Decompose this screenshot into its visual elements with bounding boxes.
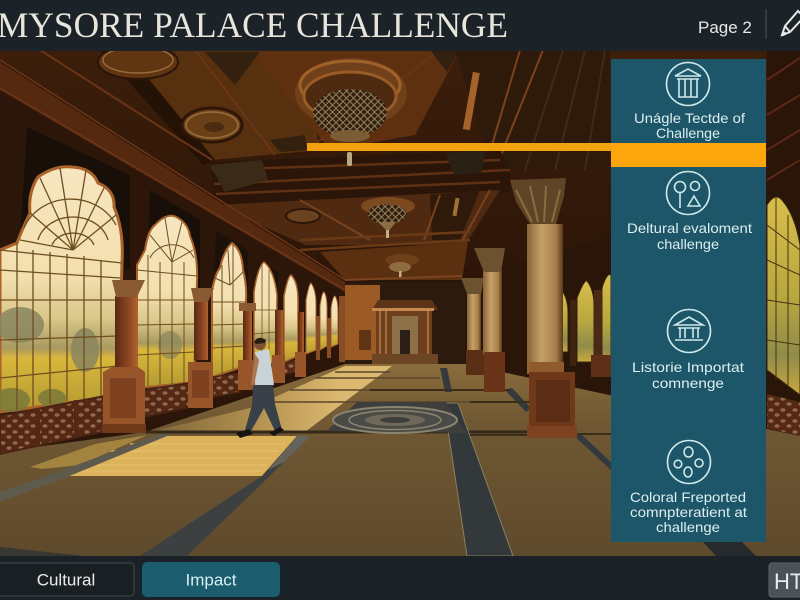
window 3: [212, 243, 246, 377]
column far: [461, 278, 484, 375]
rosette: ceiling centre: [182, 108, 242, 142]
window 6: [306, 283, 316, 354]
person walking: [236, 338, 284, 438]
left wall: [0, 60, 345, 470]
label: [630, 489, 747, 535]
top bar: [0, 0, 800, 51]
label: Challenge: [656, 125, 720, 141]
item: cultural evaluation: [627, 172, 752, 252]
window 4: [254, 262, 277, 368]
item: colonial report: [630, 440, 747, 535]
column near: [510, 178, 577, 438]
label: [627, 220, 752, 252]
label: challenge: [656, 519, 720, 535]
label: challenge: [657, 236, 719, 252]
panel: challenges: [611, 59, 766, 542]
pavilion door: [372, 300, 438, 364]
right window: [767, 196, 800, 436]
label: comnpteratient at: [630, 504, 747, 520]
back wall: [345, 282, 465, 366]
sunlit patch: [67, 436, 297, 476]
progress bar: orange: [307, 143, 766, 167]
main chandelier: [295, 58, 407, 166]
label: comnenge: [652, 375, 724, 391]
button: Cultural: Cultural: [37, 570, 95, 590]
page label: Page 2: [698, 18, 752, 37]
item: historic importance: [632, 310, 744, 391]
far sunlit floor: [150, 366, 392, 432]
ceiling: [0, 45, 800, 280]
icon: temple: [666, 62, 710, 106]
right ceiling planks: [455, 50, 610, 170]
dappled patch: [30, 435, 147, 469]
column 4: [272, 310, 285, 383]
window 1: [0, 167, 122, 412]
column middle: [474, 248, 505, 392]
label: [632, 359, 744, 391]
label: [634, 110, 745, 141]
icon: museum: [668, 310, 710, 352]
item: unique test: [634, 62, 745, 141]
window 8: [331, 296, 338, 347]
right wall: [462, 180, 800, 440]
left balustrade: [0, 360, 296, 454]
right columns: [461, 178, 577, 438]
right-hand windows behind panel: [556, 275, 611, 377]
title: MYSORE PALACE CHALLENGE: [0, 5, 508, 45]
third chandelier: [385, 254, 419, 277]
label: Deltural evaloment: [627, 220, 752, 236]
left windows: [0, 167, 338, 412]
floor medallion: [327, 402, 466, 433]
stone band centre: [444, 403, 513, 556]
distant trees: [0, 307, 99, 412]
label: Coloral Freported: [630, 489, 746, 505]
stone band left: [0, 434, 172, 502]
rosette: ceiling left: [98, 45, 178, 79]
middle ceiling panel: [215, 190, 500, 245]
window 2: [137, 216, 197, 388]
icon: magnifier and flower: [666, 172, 710, 214]
second chandelier: [361, 197, 415, 238]
button: Cultural: [0, 563, 134, 596]
shadow line: [145, 430, 530, 434]
cross beams: [210, 150, 510, 205]
left columns: [102, 280, 345, 433]
column 1: [102, 280, 146, 433]
label: Unágle Tectde of: [634, 110, 745, 126]
column 5: [295, 312, 306, 377]
floor: [0, 364, 800, 556]
stone band centre-left: [140, 436, 311, 556]
icon: pencil: [782, 11, 800, 35]
button: Impact: [142, 562, 280, 597]
label: Listorie Importat: [632, 359, 744, 375]
button: Impact: Impact: [185, 570, 237, 590]
window 5: [284, 275, 298, 362]
bottom bar: [0, 556, 800, 600]
icon: circles: [668, 440, 710, 484]
rear ceiling panel: [320, 242, 468, 280]
column 3: [238, 303, 258, 390]
button: HT cut off: [769, 563, 800, 597]
column 2: [188, 288, 214, 408]
window 7: [320, 292, 327, 350]
